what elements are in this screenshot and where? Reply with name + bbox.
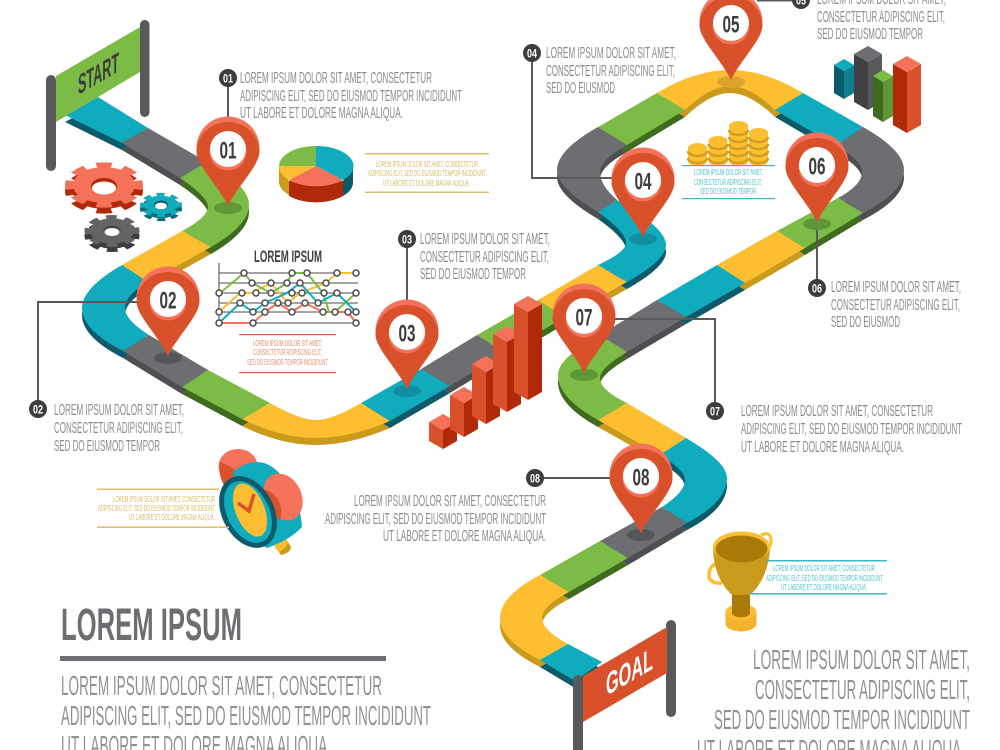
step 03 callout: SED DO EIUSMOD TEMPOR — [420, 266, 526, 283]
pin 03: 03 — [398, 320, 416, 348]
pin 04: 04 — [634, 168, 652, 196]
pin 04 — [612, 148, 674, 245]
step 07 callout: 07 — [710, 404, 720, 418]
step 07 callout — [706, 402, 962, 456]
caption: line chart: CONSECTETUR ADIPISCING ELIT, — [253, 347, 322, 357]
caption: coins: LOREM IPSUM DOLOR SIT AMET, — [694, 167, 763, 177]
caption: coins: SED DO EIUSMOD TEMPOR — [700, 186, 756, 196]
step 01 callout: LOREM IPSUM DOLOR SIT AMET, CONSECTETUR — [240, 70, 432, 87]
step 04 callout: CONSECTETUR ADIPISCING ELIT, — [546, 63, 675, 80]
start flag — [46, 20, 150, 171]
icon: red rising bars — [429, 296, 542, 449]
caption: line chart: SED DO EIUSMOD TEMPOR INCIDIDUNT — [247, 357, 328, 367]
step 06 callout: SED DO EIUSMOD — [831, 314, 900, 331]
connector lines — [38, 0, 817, 478]
step 04 callout — [523, 44, 676, 97]
caption: line chart — [239, 334, 336, 373]
pin 06: 06 — [808, 154, 826, 180]
icon: gray gear — [83, 214, 141, 253]
icon: 3D bar group — [834, 46, 921, 133]
road: winding isometric path — [65, 70, 904, 688]
step 02 callout — [29, 400, 184, 455]
heading rule — [60, 656, 386, 661]
step 01 callout: UT LABORE ET DOLORE MAGNA ALIQUA. — [240, 105, 403, 122]
icon: trophy — [709, 532, 771, 632]
pin 08 — [610, 444, 672, 541]
step 08 callout: LOREM IPSUM DOLOR SIT AMET, CONSECTETUR — [354, 493, 546, 510]
step 04 callout: 04 — [527, 46, 537, 60]
pie chart — [279, 146, 354, 202]
step 02 callout: CONSECTETUR ADIPISCING ELIT, — [54, 420, 183, 437]
caption: trophy: ADIPISCING ELIT, SED DO EIUSMOD TEMPOR INCIDIDUNT — [766, 573, 883, 583]
step 02 callout: SED DO EIUSMOD TEMPOR — [54, 438, 160, 455]
caption: pie chart: LOREM IPSUM DOLOR SIT AMET, CONSECTETUR — [376, 159, 478, 169]
pin 05: 05 — [722, 12, 740, 38]
step 06 callout: 06 — [812, 282, 822, 296]
caption: alarm clock: UT LABORE ET DOLORE MAGNA ALIQUA. — [129, 512, 215, 522]
text: ADIPISCING ELIT, SED DO EIUSMOD TEMPOR INCIDIDUNT — [61, 700, 431, 731]
left paragraph — [61, 670, 431, 750]
goal flag: GOAL — [606, 642, 653, 703]
step 06 callout — [808, 279, 961, 331]
caption: trophy: LOREM IPSUM DOLOR SIT AMET, CONSECTETUR — [773, 563, 875, 573]
pin 07 — [552, 284, 616, 381]
step 01 callout: 01 — [223, 72, 233, 86]
pin 03 — [376, 300, 438, 397]
caption: pie chart: ADIPISCING ELIT, SED DO EIUSMOD TEMPOR INCIDIDUNT — [368, 168, 486, 178]
text: ADIPISCING ELIT, SED DO EIUSMOD TEMPOR INCIDIDUNT — [325, 511, 546, 528]
line chart heading: LOREM IPSUM — [254, 247, 322, 266]
step 08 callout: UT LABORE ET DOLORE MAGNA ALIQUA. — [383, 528, 546, 545]
goal flag — [573, 620, 676, 750]
step 03 callout: LOREM IPSUM DOLOR SIT AMET, — [420, 231, 550, 248]
line chart — [216, 263, 359, 326]
caption: coins: CONSECTETUR ADIPISCING ELIT, — [694, 177, 762, 187]
step 08 callout — [325, 469, 546, 545]
pin 05 — [700, 0, 762, 88]
caption: alarm clock: ADIPISCING ELIT, SED DO EIUSMOD TEMPOR INCIDIDUNT — [98, 503, 215, 513]
step 05 callout — [792, 0, 946, 43]
left paragraph: LOREM IPSUM DOLOR SIT AMET, CONSECTETUR — [61, 670, 382, 701]
icon: teal gear — [139, 192, 183, 222]
step 02 callout: LOREM IPSUM DOLOR SIT AMET, — [54, 402, 184, 419]
caption: pie chart — [365, 153, 489, 193]
step 04 callout: LOREM IPSUM DOLOR SIT AMET, — [546, 45, 676, 62]
step 08 callout: 08 — [530, 472, 540, 486]
pin 06 — [786, 132, 848, 230]
caption: pie chart: UT LABORE ET DOLORE MAGNA ALIQUA. — [383, 178, 470, 188]
caption: alarm clock — [97, 488, 229, 528]
step 03 callout: CONSECTETUR ADIPISCING ELIT, — [420, 249, 549, 266]
pin 02: 02 — [160, 288, 176, 314]
pin 01: 01 — [220, 138, 236, 164]
caption: trophy — [750, 560, 887, 594]
icon: red gear — [63, 161, 145, 215]
caption: alarm clock: LOREM IPSUM DOLOR SIT AMET, CONSECTETUR — [113, 494, 215, 504]
step 04 callout: SED DO EIUSMOD — [546, 80, 615, 97]
caption: trophy: UT LABORE ET DOLORE MAGNA ALIQUA. — [781, 582, 867, 592]
step 03 callout: 03 — [402, 232, 412, 246]
step 02 callout: 02 — [33, 402, 43, 416]
pin 01 — [196, 116, 260, 214]
caption: line chart: LOREM IPSUM DOLOR SIT AMET, — [253, 338, 322, 348]
icon: coin stacks — [682, 121, 775, 168]
start flag: START — [78, 47, 119, 101]
main heading: LOREM IPSUM — [61, 599, 242, 650]
caption: coins — [682, 165, 775, 199]
pin 07: 07 — [576, 304, 592, 332]
pin 08: 08 — [632, 464, 650, 492]
step 01 callout — [219, 69, 462, 122]
pin 02 — [136, 266, 200, 364]
icon: alarm clock — [208, 449, 310, 558]
right paragraph — [697, 644, 970, 750]
text: ADIPISCING ELIT, SED DO EIUSMOD TEMPOR INCIDIDUNT — [240, 88, 462, 105]
step 03 callout — [398, 230, 550, 283]
